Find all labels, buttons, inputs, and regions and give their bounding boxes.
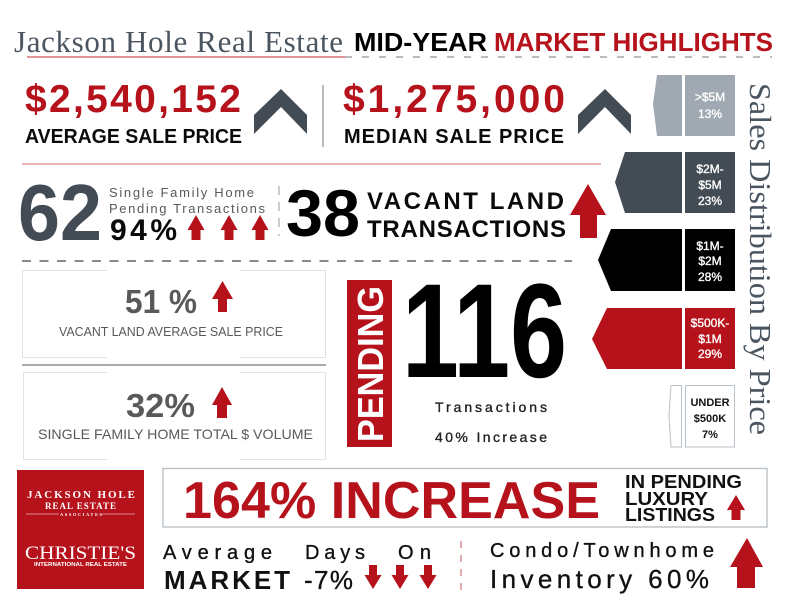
stat: 116 pending transactions: 116	[402, 257, 567, 406]
icon: chevron up	[578, 89, 631, 134]
bar: 1M to 2M: 28%	[698, 270, 722, 284]
bar: 1M to 2M	[598, 229, 735, 291]
stat: 38 vacant land transactions: TRANSACTIONS	[367, 216, 566, 243]
stat: average days on market: -7%	[304, 565, 353, 595]
logo: Jackson Hole Real Estate / Christie's: JACKSON HOLE	[27, 489, 135, 501]
stat: 38 vacant land transactions: VACANT LAND	[367, 188, 564, 215]
stat: 62 single family pending: 94%	[110, 214, 177, 247]
title: MARKET HIGHLIGHTS	[494, 27, 773, 57]
stat: average days on market: MARKET	[164, 565, 290, 595]
panel: vacant land average sale price	[22, 270, 326, 358]
panel: vacant land average sale price: VACANT LAND AVERAGE SALE PRICE	[59, 324, 283, 339]
logo: Jackson Hole Real Estate / Christie's: ASSOCIATES	[60, 512, 102, 517]
title	[14, 24, 773, 59]
logo: Jackson Hole Real Estate / Christie's	[17, 470, 144, 589]
bar: 1M to 2M: $2M	[698, 254, 722, 268]
stat: 62 single family pending: 62	[18, 168, 102, 257]
panel: pending label: PENDING	[350, 286, 391, 442]
bar: 2M to 5M: 23%	[698, 194, 722, 208]
stat: median sale price: MEDIAN SALE PRICE	[344, 126, 564, 148]
bar: 500K to 1M: $500K-	[691, 316, 729, 330]
logo: Jackson Hole Real Estate / Christie's: INTERNATIONAL REAL ESTATE	[34, 562, 127, 568]
panel: 164% increase: LISTINGS	[625, 504, 715, 525]
stat: average days on market: Days	[305, 542, 365, 564]
title: Jackson Hole Real Estate	[14, 24, 343, 59]
stat: median sale price	[343, 78, 565, 148]
logo: Jackson Hole Real Estate / Christie's: CHRISTIE'S	[25, 543, 136, 564]
panel: 164% increase	[163, 468, 767, 530]
bar: over 5M: 13%	[698, 107, 722, 121]
stat: 62 single family pending: Single Family Home	[109, 185, 254, 200]
bar: 500K to 1M: 29%	[698, 347, 722, 361]
chart: sales distribution by price	[592, 75, 735, 447]
stat: average sale price	[25, 78, 242, 148]
panel: single family home total volume: SINGLE FAMILY HOME TOTAL $ VOLUME	[38, 426, 313, 442]
logo: Jackson Hole Real Estate / Christie's: REAL ESTATE	[45, 501, 116, 511]
panel: 164% increase: 164% INCREASE	[183, 472, 600, 530]
bar: under 500K: UNDER	[690, 397, 730, 409]
stat: 116 pending transactions: Transactions	[435, 399, 547, 415]
stat: 116 pending transactions: 40% Increase	[435, 429, 547, 445]
heading: sales distribution by price: Sales Distribution By Price	[743, 83, 778, 435]
stat: average sale price: $2,540,152	[25, 78, 241, 121]
bar: 500K to 1M	[592, 308, 735, 369]
stat: condo townhome inventory: Condo/Townhome	[490, 540, 714, 562]
icon: large up arrow	[730, 538, 763, 588]
stat: average days on market: Average	[163, 542, 272, 564]
icon: big up arrow	[570, 184, 606, 238]
bar: 2M to 5M: $5M	[698, 178, 722, 192]
bar: 2M to 5M	[615, 152, 735, 213]
bar: 2M to 5M: $2M-	[696, 162, 724, 176]
panel: 164% increase: IN PENDING	[625, 471, 742, 492]
bar: 1M to 2M: $1M-	[696, 239, 724, 253]
panel: vacant land average sale price: 51 %	[125, 283, 197, 320]
stat: 62 single family pending	[18, 168, 268, 257]
bar: over 5M: >$5M	[695, 90, 725, 104]
bar: under 500K	[669, 386, 734, 447]
icon: chevron up	[254, 89, 307, 134]
bar: over 5M	[653, 75, 735, 136]
title: MID-YEAR	[354, 27, 487, 57]
stat: average days on market: On	[398, 542, 431, 564]
stat: 62 single family pending: Pending Transactions	[109, 201, 266, 216]
panel: 164% increase: LUXURY	[625, 488, 709, 509]
stat: 116 pending transactions	[402, 257, 567, 445]
stat: condo townhome inventory: Inventory 60%	[490, 564, 709, 594]
stat: median sale price: $1,275,000	[343, 78, 565, 121]
stat: condo townhome inventory	[490, 540, 714, 594]
panel: single family home total volume: 32%	[126, 387, 195, 424]
stat: 38 vacant land transactions	[286, 176, 566, 250]
panel: single family home total volume	[24, 372, 326, 460]
stat: 38 vacant land transactions: 38	[286, 176, 360, 250]
bar: under 500K: 7%	[702, 429, 718, 441]
stat: average days on market	[163, 542, 436, 595]
bar: 500K to 1M: $1M	[698, 332, 722, 346]
stat: average sale price: AVERAGE SALE PRICE	[25, 126, 242, 148]
bar: under 500K: $500K	[694, 413, 726, 425]
